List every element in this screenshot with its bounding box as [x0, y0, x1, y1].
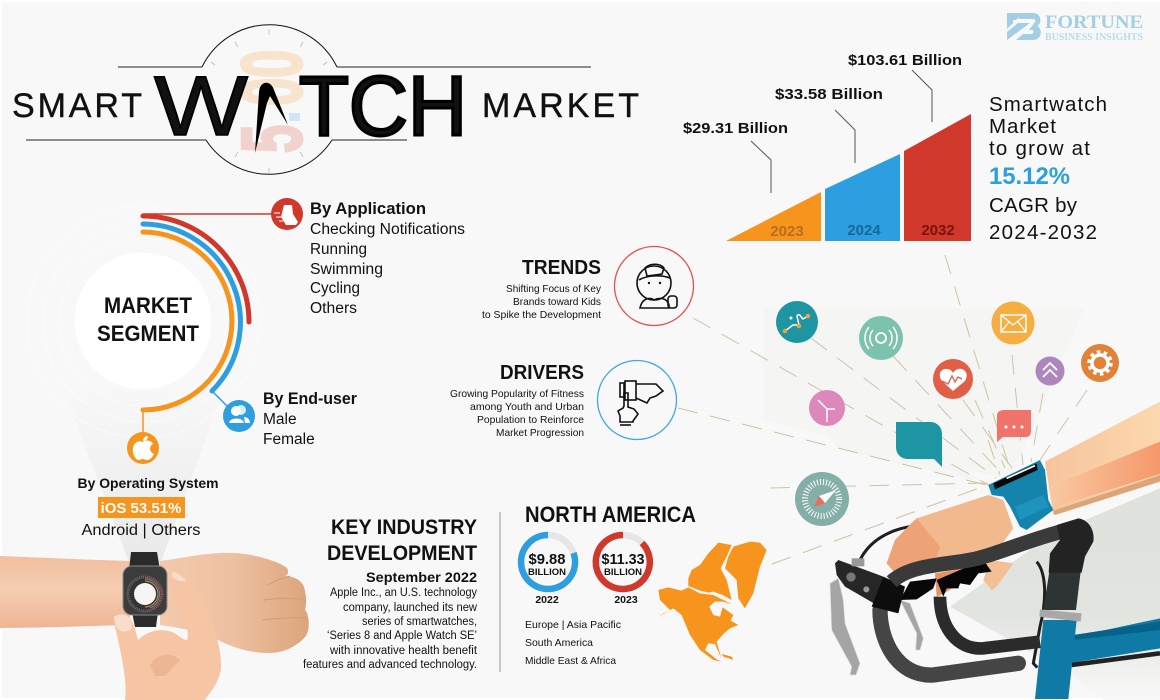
CAGR text block — [989, 93, 1107, 244]
heading: key industry development: company, launched its new — [343, 602, 478, 614]
logo: Fortune Business Insights — [1007, 13, 1143, 43]
CAGR text block: 15.12% — [989, 163, 1070, 190]
ground shadow — [950, 488, 1160, 700]
trends heading and text: Brands toward Kids — [513, 296, 601, 308]
heading: key industry development: ‘Series 8 and Apple Watch SE’ — [327, 630, 477, 642]
value label: 2032: $103.61 Billion — [848, 53, 962, 69]
title: Smart Watch Market — [12, 25, 639, 174]
trends heading and text — [482, 257, 602, 321]
trends heading and text: TRENDS — [522, 257, 601, 279]
drivers heading and text: Market Progression — [496, 427, 584, 439]
bar: 2024: 2024 — [847, 222, 881, 239]
operating system text: By Operating System — [78, 475, 218, 491]
end-user segment text — [263, 390, 358, 448]
smart band — [988, 460, 1053, 530]
hand — [887, 495, 1013, 597]
bar: 2023: 2023 — [770, 223, 804, 240]
CAGR text block: Market — [989, 115, 1056, 138]
bar: 2032: 2032 — [921, 222, 955, 239]
value label: 2023 — [683, 121, 788, 193]
donut: 2023 — [596, 535, 650, 606]
value label: 2032 — [848, 53, 962, 122]
brake hood — [835, 558, 992, 613]
title: Smart Watch Market: SMART — [12, 87, 142, 125]
heading: key industry development: DEVELOPMENT — [327, 542, 477, 565]
icon: trends kid with smartwatch — [614, 246, 694, 326]
end-user segment text: Male — [263, 411, 297, 428]
heading: key industry development: Apple Inc., an U.S. technology — [330, 587, 477, 599]
value label: 2024: $33.58 Billion — [775, 87, 883, 103]
logo: Fortune Business Insights: BUSINESS INSIGHTS — [1045, 32, 1143, 43]
application segment text: Running — [310, 241, 367, 258]
heading: key industry development: KEY INDUSTRY — [331, 516, 477, 539]
application segment text: Others — [310, 300, 357, 317]
drivers heading and text: Population to Reinforce — [477, 414, 584, 426]
lower drop front — [880, 610, 1018, 675]
heading: key industry development: series of smartwatches, — [362, 616, 477, 628]
panel: market segment — [27, 206, 259, 438]
title: Smart Watch Market: MARKET — [482, 87, 639, 125]
drivers heading and text: DRIVERS — [500, 362, 584, 384]
title: Smart Watch Market: W — [154, 59, 248, 153]
CAGR text block: 2024-2032 — [989, 221, 1097, 244]
icon: compass — [795, 472, 849, 526]
title: Smart Watch Market: 0 — [225, 50, 319, 78]
donut: 2023: 2023 — [614, 594, 638, 606]
arc: end-user — [143, 224, 240, 391]
trends heading and text: to Spike the Development — [482, 309, 601, 321]
application segment text: Swimming — [310, 261, 383, 278]
other regions list — [525, 619, 621, 667]
bar: 2032 — [904, 114, 971, 241]
icon: mail — [992, 302, 1034, 344]
drivers heading and text: among Youth and Urban — [470, 401, 584, 413]
application segment text — [310, 200, 465, 317]
trends heading and text: Shifting Focus of Key — [506, 283, 602, 295]
arc: operating system — [143, 232, 232, 410]
icon: chevrons — [1036, 356, 1064, 386]
donut: 2022: BILLION — [528, 567, 566, 578]
heading: key industry development: features and advanced technology. — [303, 659, 477, 671]
heading: key industry development: September 2022 — [366, 569, 477, 585]
cables — [860, 527, 1045, 668]
end-user segment text: By End-user — [263, 390, 358, 408]
other regions list: Middle East & Africa — [525, 655, 616, 667]
arc: application — [143, 216, 249, 322]
heading: key industry development — [303, 516, 478, 671]
center circle: SEGMENT — [97, 321, 200, 346]
operating system text: iOS 53.51% — [101, 500, 181, 517]
icon: clock — [809, 390, 845, 426]
icon: drivers hand tapping smartwatch — [598, 360, 676, 440]
lower drop back — [940, 597, 1040, 648]
fan background behind app icons — [763, 308, 1085, 480]
map: north america — [657, 542, 767, 662]
icon: red speech bubble — [997, 410, 1031, 442]
application segment text: Cycling — [310, 280, 360, 297]
bar: 2024 — [825, 154, 900, 241]
logo: Fortune Business Insights: FORTUNE — [1045, 13, 1143, 33]
icon: teal speech bubble — [896, 422, 942, 467]
operating system text: Android | Others — [82, 522, 201, 539]
donut: 2023: $11.33 — [602, 551, 644, 568]
drivers heading and text — [450, 362, 584, 439]
bar: 2023 — [726, 192, 821, 241]
center circle: MARKET — [104, 293, 193, 318]
heading: key industry development: with innovative health benefit — [329, 645, 478, 657]
icon: heart rate — [933, 359, 973, 399]
donut: 2023: BILLION — [604, 567, 642, 578]
CAGR text block: to grow at — [989, 137, 1090, 160]
drivers heading and text: Growing Popularity of Fitness — [450, 388, 584, 400]
illustration: hand with smartwatch — [0, 552, 309, 700]
heading: north america: NORTH AMERICA — [525, 502, 696, 527]
title: Smart Watch Market: 0 — [225, 78, 319, 106]
donut: 2022: 2022 — [535, 594, 559, 606]
application segment text: By Application — [310, 200, 426, 218]
donut: 2022 — [521, 535, 575, 606]
other regions list: South America — [525, 637, 593, 649]
head tube — [1035, 572, 1082, 699]
CAGR text block: CAGR by — [989, 194, 1078, 217]
icon: users — [212, 391, 255, 432]
forearm — [1045, 402, 1160, 515]
icon: running shoe — [143, 198, 303, 230]
operating system light beam — [62, 385, 225, 565]
growth chart — [683, 53, 971, 241]
icon: signal — [859, 316, 903, 360]
CAGR text block: Smartwatch — [989, 93, 1107, 116]
value label: 2024 — [775, 87, 883, 163]
operating system text — [78, 475, 218, 539]
icon: gear — [1081, 344, 1119, 382]
brake lever — [830, 578, 923, 675]
application segment text: Checking Notifications — [310, 221, 465, 238]
center circle — [74, 252, 212, 390]
icon: apple — [127, 410, 159, 464]
end-user segment text: Female — [263, 431, 315, 448]
bike tube — [1067, 618, 1160, 665]
title: Smart Watch Market: 5 — [225, 125, 319, 153]
other regions list: Europe | Asia Pacific — [525, 619, 621, 631]
value label: 2023: $29.31 Billion — [683, 121, 788, 137]
upper handlebar — [892, 518, 1094, 582]
dashed rays from wrist device — [678, 255, 1087, 564]
donut: 2022: $9.88 — [528, 551, 566, 568]
icon: running route — [776, 301, 818, 343]
illustration: arm on bicycle handlebar with smart band — [830, 402, 1160, 700]
title: Smart Watch Market: TCH — [299, 59, 467, 153]
